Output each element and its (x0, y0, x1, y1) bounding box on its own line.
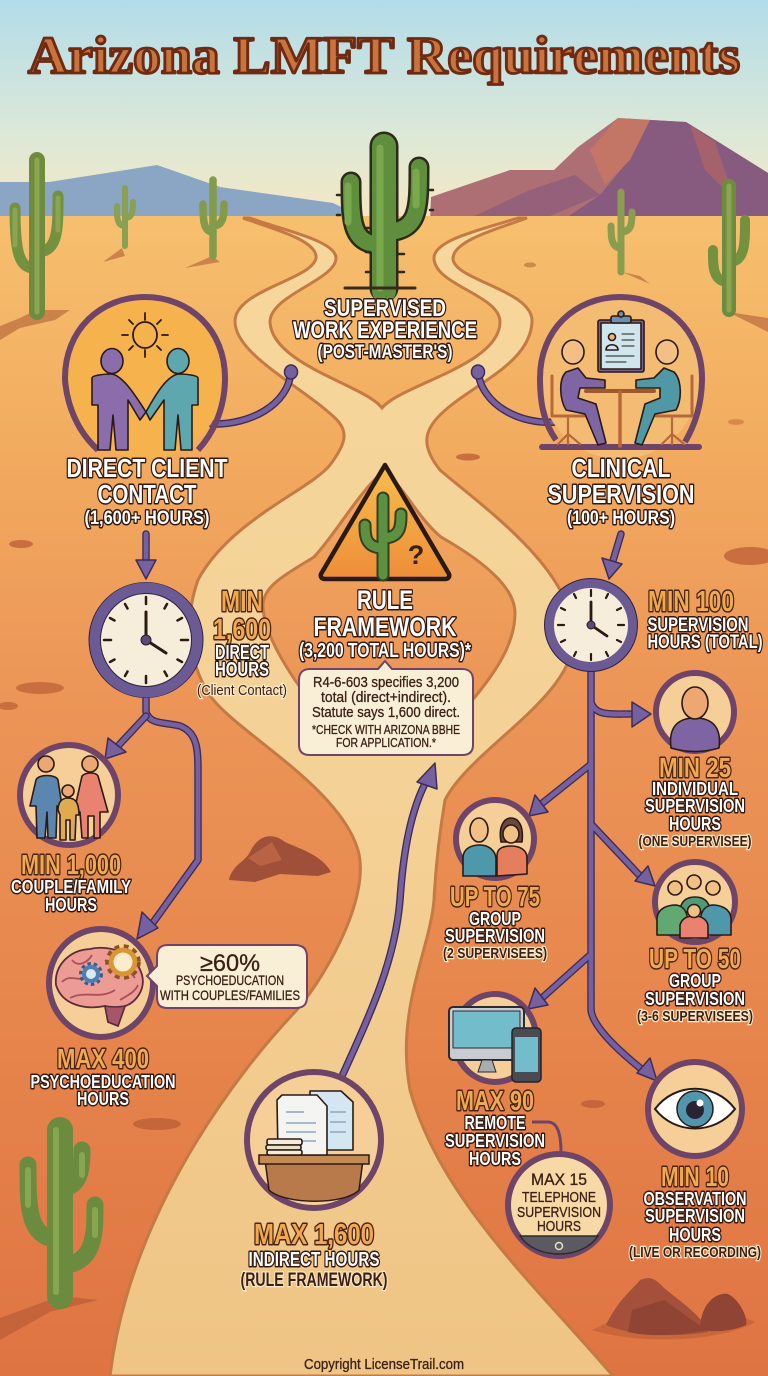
callout: rule note: FOR APPLICATION.* (336, 735, 436, 750)
label: max 400 psychoeducation: MAX 400 (57, 1043, 149, 1074)
node: group of two (456, 800, 534, 878)
cactus: mid left (203, 180, 224, 256)
icon: warning sign with cactus (321, 465, 449, 579)
label: up to 75 group: SUPERVISION (445, 926, 545, 946)
heading: rule framework: RULE (357, 585, 413, 615)
node: brain (49, 929, 153, 1037)
callout: 60 percent psychoeducation: PSYCHOEDUCATION (176, 972, 284, 988)
label: max 1,600 indirect: (RULE FRAMEWORK) (240, 1270, 388, 1291)
label: up to 50 group: GROUP (669, 971, 721, 991)
connector: direct client to road (212, 365, 298, 424)
heading: supervised work experience: WORK EXPERIENCE (293, 317, 477, 344)
callout: 60 percent psychoeducation (147, 945, 307, 1008)
cactus: left big (15, 160, 58, 312)
heading: direct client contact: CONTACT (98, 479, 197, 509)
connector: remote to telephone (532, 1122, 561, 1152)
clock label: min 1,600 direct hours: 1,600 (213, 614, 271, 646)
arrow: indirect to rule framework (343, 763, 437, 1074)
clock label: min 1,600 direct hours: DIRECT (215, 642, 269, 664)
panel: clinical supervision circle (539, 297, 702, 459)
node: individual supervision (656, 673, 734, 752)
winding road (110, 218, 613, 1376)
heading: direct client contact: (1,600+ HOURS) (84, 508, 210, 529)
icon: large gear (111, 950, 135, 974)
clock label: min 1,600 direct hours: MIN (221, 586, 263, 618)
callout: 60 percent psychoeducation: ≥60% (200, 950, 260, 977)
node: telephone (508, 1154, 610, 1256)
arrows: right branch from clock (528, 672, 657, 1081)
node: observation eye (648, 1062, 742, 1156)
label: min 1,000 couple/family: HOURS (45, 895, 97, 915)
label: max 400 psychoeducation: HOURS (77, 1089, 129, 1109)
heading: clinical supervision: (100+ HOURS) (567, 508, 675, 529)
label: min 25 individual: INDIVIDUAL (652, 779, 738, 799)
icon: sun (122, 313, 168, 357)
sky (0, 0, 768, 222)
cactus: small right (611, 192, 632, 272)
callout: rule note (299, 661, 473, 755)
heading: supervised work experience: (POST-MASTER'S) (318, 342, 452, 363)
copyright: Copyright LicenseTrail.com (304, 1356, 464, 1373)
icon: small gear (84, 967, 98, 981)
label: max 90 remote: SUPERVISION (445, 1131, 545, 1151)
clock: left (88, 582, 204, 698)
label: max 90 remote: MAX 90 (456, 1085, 534, 1116)
heading: direct client contact (66, 453, 228, 529)
label: up to 75 group: GROUP (469, 909, 521, 929)
mesa (430, 118, 768, 222)
label: max 1,600 indirect (240, 1219, 388, 1291)
node: indirect hours desk (247, 1072, 381, 1208)
label: max 400 psychoeducation (30, 1043, 176, 1109)
label: min 1,000 couple/family: COUPLE/FAMILY (11, 877, 131, 897)
label: up to 75 group: (2 SUPERVISEES) (443, 945, 547, 962)
node: telephone: TELEPHONE (522, 1189, 596, 1206)
node: group of six (655, 862, 735, 942)
icon: warning sign with cactus: ? (408, 540, 424, 570)
clock label: min 100 supervision hours (648, 586, 762, 653)
heading: clinical supervision (548, 453, 694, 529)
heading: clinical supervision: SUPERVISION (548, 479, 694, 509)
node: family (20, 745, 118, 845)
heading: clinical supervision: CLINICAL (572, 453, 671, 483)
arrow: clinical supervision to clock (602, 534, 622, 579)
label: up to 75 group (443, 881, 547, 962)
arrow: direct client to clock (136, 534, 156, 579)
cactus: center (337, 146, 433, 291)
cactus: bottom left (28, 1130, 95, 1296)
heading: rule framework: FRAMEWORK (314, 612, 457, 642)
clock label: min 1,600 direct hours: HOURS (215, 659, 269, 681)
label: max 90 remote: HOURS (469, 1149, 521, 1169)
label: max 1,600 indirect: INDIRECT HOURS (248, 1249, 380, 1271)
label: min 25 individual: MIN 25 (659, 752, 731, 783)
clock label: min 100 supervision hours: MIN 100 (648, 586, 734, 618)
label: min 1,000 couple/family: MIN 1,000 (21, 849, 121, 880)
heading: direct client contact: DIRECT CLIENT (66, 453, 228, 483)
callout: rule note: R4-6-603 specifies 3,200 (313, 674, 459, 691)
node: remote devices (449, 994, 541, 1082)
cactus: small left (117, 188, 133, 246)
title: Arizona LMFT Requirements (28, 27, 740, 85)
label: min 10 observation: HOURS (669, 1225, 721, 1245)
cactus shadows (0, 248, 768, 1340)
clock label: min 1,600 direct hours (197, 586, 287, 699)
icon: two people shaking hands (92, 348, 198, 450)
label: min 25 individual (638, 752, 752, 850)
heading: supervised work experience: SUPERVISED (324, 295, 446, 322)
heading: supervised work experience (293, 295, 477, 363)
panel: direct client circle (65, 297, 225, 459)
center island (263, 470, 515, 740)
node: telephone: HOURS (537, 1218, 581, 1235)
node: telephone: SUPERVISION (517, 1204, 601, 1221)
label: min 1,000 couple/family (11, 849, 131, 915)
label: up to 50 group: SUPERVISION (645, 989, 745, 1009)
label: up to 75 group: UP TO 75 (450, 881, 540, 912)
blue mountains (0, 165, 372, 222)
connector: clinical supervision to road (472, 365, 556, 422)
cactus: right big (713, 186, 745, 310)
callout: rule note: Statute says 1,600 direct. (312, 704, 460, 721)
clock label: min 1,600 direct hours: (Client Contact) (197, 682, 287, 699)
callout: rule note: total (direct+indirect). (321, 689, 451, 706)
callout: rule note: *CHECK WITH ARIZONA BBHE (312, 722, 460, 737)
label: up to 50 group (637, 943, 753, 1025)
label: max 90 remote: REMOTE (464, 1113, 526, 1133)
label: min 10 observation (629, 1161, 761, 1261)
rocks and pebbles (0, 262, 768, 1339)
label: min 10 observation: MIN 10 (661, 1161, 729, 1192)
arrows: left branch from clock (105, 698, 198, 939)
label: min 25 individual: HOURS (669, 814, 721, 834)
label: max 90 remote (445, 1085, 545, 1169)
label: max 1,600 indirect: MAX 1,600 (254, 1219, 374, 1251)
label: max 400 psychoeducation: PSYCHOEDUCATION (30, 1072, 176, 1092)
label: min 10 observation: SUPERVISION (645, 1206, 745, 1226)
heading: rule framework: (3,200 TOTAL HOURS)* (299, 640, 471, 662)
icon: clipboard (598, 311, 644, 372)
heading: rule framework (299, 585, 471, 662)
label: min 25 individual: SUPERVISION (645, 796, 745, 816)
node: telephone: MAX 15 (531, 1170, 587, 1189)
icon: meeting at table (552, 340, 692, 446)
callout: 60 percent psychoeducation: WITH COUPLES/FAMILIES (160, 987, 300, 1003)
clock: right (544, 578, 638, 672)
